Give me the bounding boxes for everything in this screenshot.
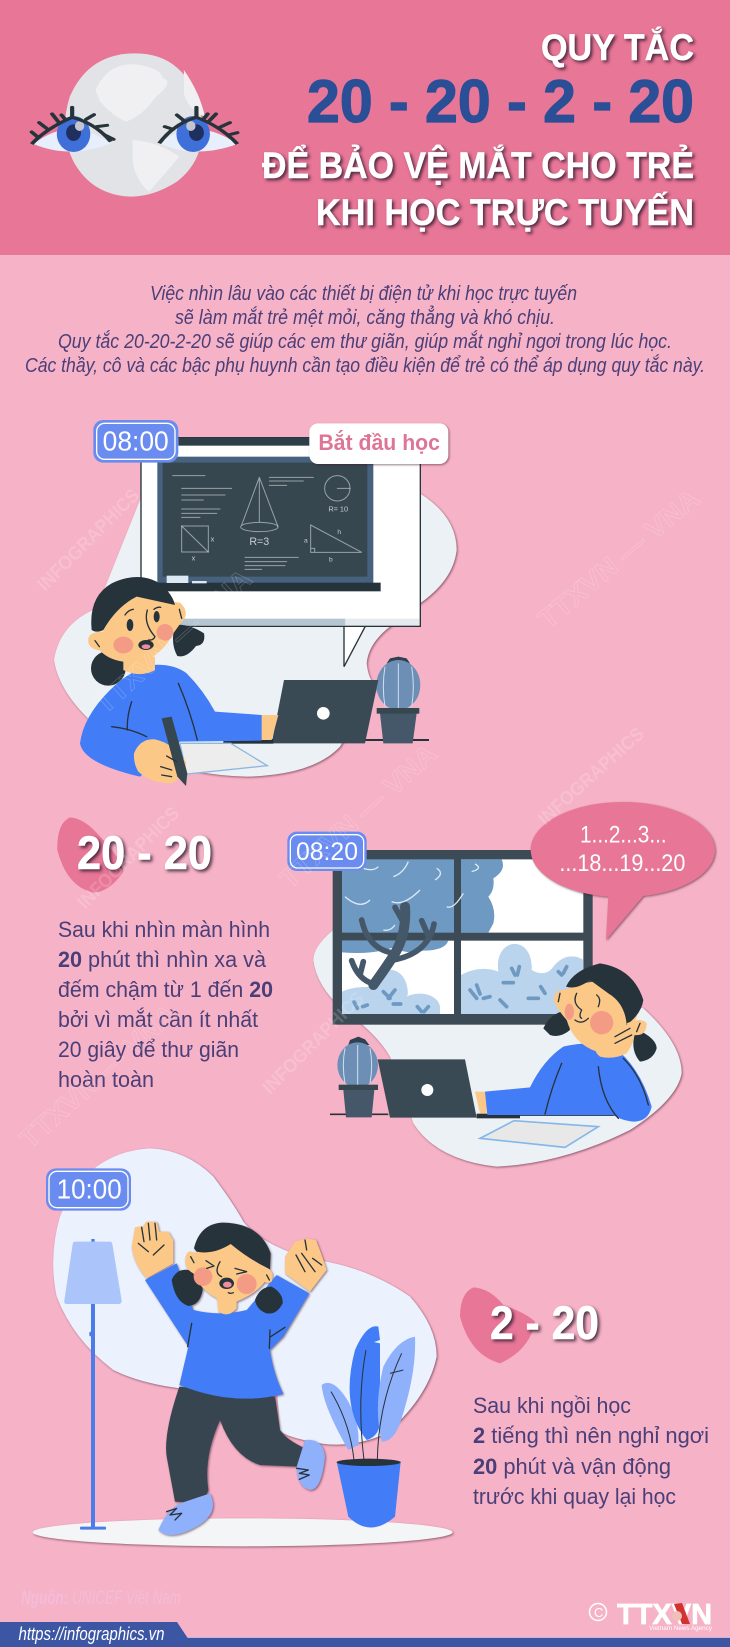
header band [0, 0, 730, 255]
logo: TTXVN: TTXVN [617, 1599, 712, 1631]
text: 2-20 rule: trước khi quay lại học [473, 1484, 676, 1509]
footer bar [0, 1622, 730, 1647]
watermarks: TTXVN — VNA [274, 738, 443, 894]
text: 2-20 rule: Sau khi ngồi học [473, 1393, 631, 1418]
watermarks: INFOGRAPHICS [34, 485, 144, 596]
heading: 2 - 20 [460, 1287, 599, 1363]
floor lamp [64, 1239, 122, 1530]
watermarks: INFOGRAPHICS [259, 988, 369, 1099]
text: 20-20 rule: bởi vì mắt cần ít nhất [58, 1007, 259, 1032]
clock 08:20 [287, 832, 367, 871]
intro text [25, 283, 705, 377]
title: 20 - 20 - 2 - 20 [307, 68, 694, 135]
speech bubble: counting [531, 802, 715, 940]
video window: b [329, 557, 333, 564]
intro text: Quy tắc 20-20-2-20 sẽ giúp các em thư giãn, giúp mắt nghỉ ngơi trong lúc học. [58, 330, 672, 353]
heading: 20 - 20: 20 - 20 [77, 826, 212, 879]
girl writing [80, 577, 278, 786]
scene 2: girl looking out of window [287, 802, 715, 1167]
open book [480, 1121, 598, 1147]
background blob [313, 930, 682, 1167]
background blob [53, 1148, 437, 1445]
watermarks [14, 483, 705, 1154]
text: 2-20 rule: 2 tiếng thì nên nghỉ ngơi [473, 1423, 709, 1448]
icon: globe with eyes [32, 53, 237, 197]
title [262, 26, 694, 233]
text: 20-20 rule: Sau khi nhìn màn hình [58, 917, 270, 942]
title: ĐỂ BẢO VỆ MẮT CHO TRẺ [262, 144, 694, 186]
title: QUY TẮC [541, 26, 694, 68]
watermarks: TTXVN — VNA [89, 563, 258, 719]
video window: h [337, 529, 341, 536]
clock 10:00: 10:00 [57, 1174, 122, 1205]
video window: x [192, 554, 196, 563]
watermarks: INFOGRAPHICS [534, 724, 649, 830]
watermarks: INFOGRAPHICS [74, 803, 184, 914]
laptop, plant and desk [223, 657, 429, 744]
scene 1: girl studying online [54, 420, 457, 786]
text: 2-20 rule: 20 phút và vận động [473, 1454, 671, 1479]
text: 20-20 rule: hoàn toàn [58, 1067, 154, 1092]
video window: R=3 [249, 536, 269, 548]
video window: R= 10 [328, 505, 348, 514]
heading: 20 - 20 [57, 817, 212, 893]
intro text: Việc nhìn lâu vào các thiết bị điện tử khi học trực tuyến [150, 283, 577, 305]
scene 3: girl stretching [33, 1148, 453, 1546]
text: 20-20 rule: 20 giây để thư giãn [58, 1037, 239, 1062]
logo: TTXVN: Vietnam News Agency [649, 1625, 713, 1632]
watermarks: TTXVN — VNA [14, 998, 183, 1154]
clock 10:00 [46, 1168, 131, 1211]
video window: a [304, 538, 308, 545]
speech bubble: counting: 1...2...3... [580, 822, 667, 849]
footer bar: https://infographics.vn [18, 1624, 164, 1644]
laptop, plant and desk [330, 1037, 617, 1118]
video window [141, 438, 420, 667]
intro text: sẽ làm mắt trẻ mệt mỏi, căng thẳng và khó chịu. [175, 306, 555, 329]
text: 20-20 rule [58, 917, 273, 1092]
girl with raised arms [132, 1222, 327, 1535]
heading: 2 - 20: 2 - 20 [490, 1296, 599, 1349]
logo: TTXVN: C [594, 1605, 603, 1620]
clock 08:00: 08:00 [103, 425, 169, 456]
ground ellipse [33, 1518, 453, 1546]
title: KHI HỌC TRỰC TUYẾN [316, 192, 694, 233]
callout: start studying: Bắt đầu học [318, 430, 440, 455]
text: 20-20 rule: đếm chậm từ 1 đến 20 [58, 977, 273, 1002]
girl resting chin on hand [475, 963, 657, 1122]
callout: start studying [309, 423, 448, 464]
text: 20-20 rule: 20 phút thì nhìn xa và [58, 947, 266, 972]
clock 08:20: 08:20 [296, 838, 358, 866]
source note: Nguồn: UNICEF Việt Nam [21, 1588, 181, 1609]
window with tree view [333, 850, 593, 1025]
clock 08:00 [93, 420, 178, 463]
potted plant [322, 1326, 415, 1527]
video window: x [211, 535, 215, 544]
watermarks: TTXVN — VNA [533, 483, 705, 635]
text: 2-20 rule [473, 1393, 709, 1509]
speech bubble: counting: ...18...19...20 [559, 850, 685, 877]
background blob [54, 493, 457, 777]
